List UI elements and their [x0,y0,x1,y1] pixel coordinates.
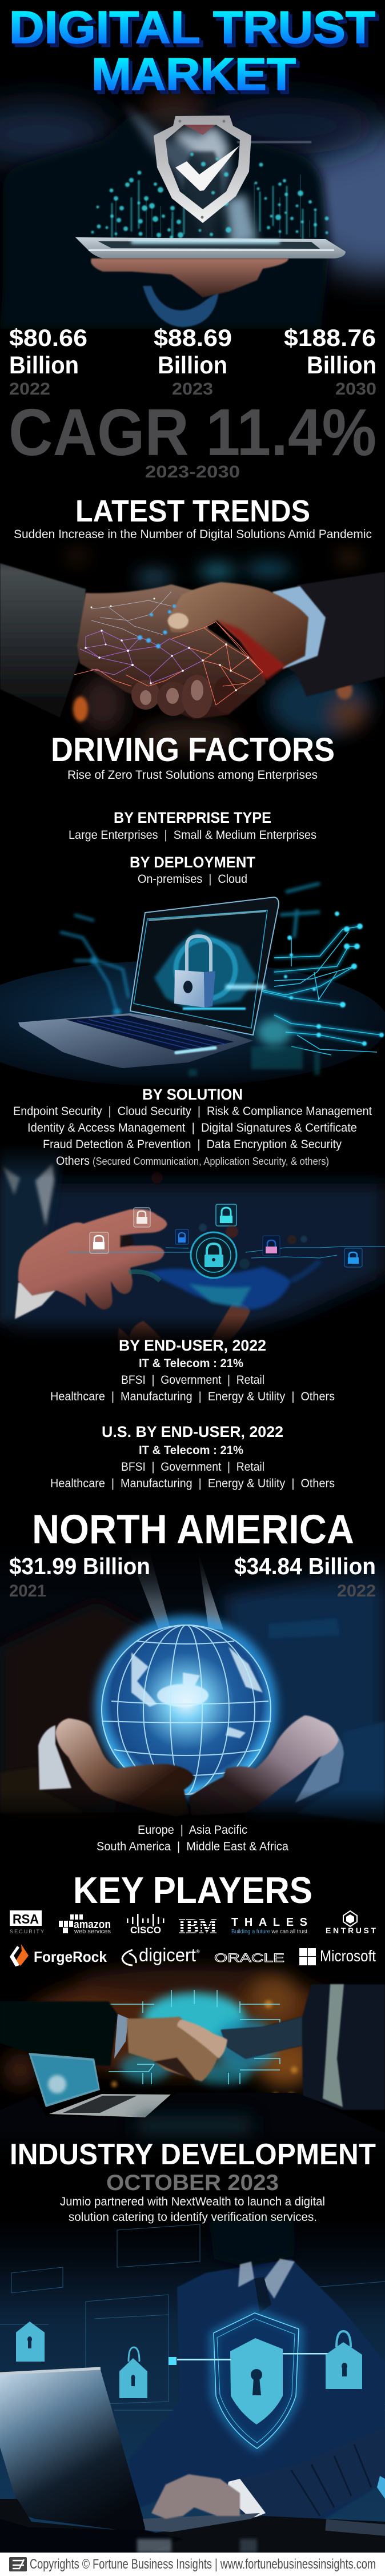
heading: KEY PLAYERS [73,1869,312,1911]
segment: global end-user: IT & Telecom : 21% [139,1357,243,1370]
suit figure [129,2219,385,2527]
segment: U.S. end-user: Healthcare | Manufacturing | Energy & Utility | Others [50,1477,335,1490]
panel: handshake over circuitry [0,1933,385,2161]
interface frames [0,2224,385,2410]
logo: RSA [10,1910,45,1934]
other regions: Europe | Asia Pacific [138,1823,247,1837]
backdrop [0,2219,385,2553]
segment: U.S. end-user: IT & Telecom : 21% [139,1444,243,1457]
logo: Amazon Web Services: amazon [74,1918,111,1931]
laptop base and keyboard [18,1013,253,1068]
far right shield emblem [377,2476,385,2499]
icon: pink blue lock [263,1236,280,1256]
photo: hand supporting the tablet [91,258,288,297]
logo: Thales: THALES [231,1916,307,1929]
segment: deployment: BY DEPLOYMENT [130,854,255,871]
development description: Jumio partnered with NextWealth to launch a digital [60,2195,325,2208]
CAGR period: 2023-2030 [145,463,240,481]
shirt panel [323,1984,344,2107]
circuit hologram [109,1990,280,2084]
logo: Thales: Building a future we can all trust [231,1929,307,1935]
logo: Cisco: CISCO [130,1925,161,1936]
wave lines [129,1261,320,1309]
photo: hands holding a glowing globe [0,1544,385,1830]
stat: 2030 [284,324,376,399]
panel: end-user segments [50,1337,335,1490]
logo: RSA: SECURITY [10,1929,45,1934]
heading: NORTH AMERICA [32,1507,354,1552]
segment: global end-user: BFSI | Government | Retail [121,1373,264,1387]
development description: solution catering to identify verification services. [69,2211,317,2224]
stat: 2021: 2021 [9,1582,46,1600]
stat: 2021: $31.99 Billion [9,1553,150,1579]
heading: DRIVING FACTORS [51,731,335,769]
stat: 2030: $188.76 [284,324,376,351]
panel: laptop with padlock [0,883,385,1098]
stat: 2022: $34.84 Billion [234,1553,376,1579]
logo: ForgeRock [10,1944,107,1966]
panel: driving factors [51,731,335,842]
stat: 2022: Billion [9,352,79,379]
sleeve and cuff below the tablet [143,286,219,327]
segment: U.S. end-user: U.S. BY END-USER, 2022 [102,1423,283,1440]
icon: upper lock [216,1204,236,1226]
segment: enterprise type: Large Enterprises | Small & Medium Enterprises [69,829,316,842]
logo: DigiCert: ® [196,1949,200,1954]
stat: 2023: $88.69 [154,324,232,351]
segment: U.S. end-user: BFSI | Government | Retail [121,1460,264,1474]
heading: LATEST TRENDS [75,494,310,528]
data particles rising from the tablet [91,153,329,240]
panel: cyber security photo [0,2219,385,2553]
segment: enterprise type: BY ENTERPRISE TYPE [114,809,271,826]
title: MARKET [91,49,296,99]
icon: laptop lid [0,2367,146,2533]
panel: market size stats [9,324,376,481]
segment: global end-user [50,1337,335,1403]
icon: metal shield with check mark [154,116,251,223]
segment: U.S. end-user [50,1423,335,1490]
other regions: South America | Middle East & Africa [97,1840,288,1853]
warm bokeh backdrop [3,1964,354,2087]
stat: 2022 [234,1553,376,1600]
panel: key players [10,1869,376,1966]
left blurred circuit lines [60,915,129,1015]
desk [0,2499,385,2553]
title: DIGITAL TRUST [11,3,377,54]
icon: tablet [75,237,346,258]
right sleeve [221,1984,385,2110]
floor glow [0,961,385,1086]
trend description: Sudden Increase in the Number of Digital Solutions Amid Pandemic [14,528,372,541]
icon: lock right [326,2331,362,2389]
icon: central lock in ring [191,1232,236,1278]
panel: north america [0,1507,385,1853]
laptop screen [130,897,279,1035]
icon: right lock [344,1248,362,1267]
development description [60,2195,325,2224]
blurred bokeh [151,1172,307,1269]
right circuit lines [262,881,385,1056]
solution list: Others [56,1154,90,1168]
photo: digital handshake [0,545,385,757]
arm highlight [221,2017,302,2059]
panel: industry development [10,2138,376,2224]
segment: global end-user: Healthcare | Manufacturing | Energy & Utility | Others [50,1390,335,1403]
icon: large shield [169,2312,331,2448]
stat: 2022: 2022 [337,1582,376,1600]
icon: lock on index finger [134,1208,150,1227]
circuit lines [69,1247,385,1258]
stat: 2021 [9,1553,150,1600]
segment: deployment [130,854,255,886]
title: MARKET [93,50,298,101]
panel: hero [0,2,385,329]
segment: deployment: On-premises | Cloud [138,873,247,886]
stat: 2023 [154,324,232,399]
segment: enterprise type [69,809,316,842]
solution list: (Secured Communication, Application Security, & others) [93,1156,329,1167]
solution list: Identity & Access Management | Digital Signatures & Certificate [27,1121,357,1134]
panel: hand touching security locks [0,1144,385,1344]
icon: lock top left [16,2322,45,2362]
icon: padlock [174,936,215,1008]
icon: lock on middle finger [90,1232,109,1253]
icon: small blue lock [175,1229,189,1244]
stat: 2023: Billion [158,352,227,379]
icon: Fortune Business Insights logo [9,2557,27,2571]
title: DIGITAL TRUST [9,2,375,53]
stat: 2022 [9,324,87,399]
solution list [13,1105,372,1168]
logo: Entrust [326,1911,376,1935]
logo: Amazon Web Services [59,1914,111,1935]
logo: Entrust: ENTRUST [326,1926,376,1935]
logo: Cisco [127,1914,165,1936]
clasped hands [127,2017,227,2081]
logo: Thales [231,1916,307,1935]
left sleeve [0,2001,118,2066]
date: OCTOBER 2023 [106,2171,279,2195]
heading: BY SOLUTION [142,1086,243,1103]
logo: Microsoft [299,1947,376,1965]
driver description: Rise of Zero Trust Solutions among Enterprises [67,769,318,782]
stat: 2022: 2022 [9,380,50,399]
stat: 2023: 2023 [172,380,213,399]
solution list: Fraud Detection & Prevention | Data Encryption & Security [43,1138,342,1151]
logo: DigiCert: digicert [139,1945,196,1965]
logo: RSA: RSA [13,1912,39,1926]
glow under circuit junction [257,1018,291,1046]
solution list: Endpoint Security | Cloud Security | Risk & Compliance Management [13,1105,372,1118]
suit backdrop [0,1144,385,1338]
other regions [97,1823,288,1853]
stat: 2022: $80.66 [9,324,87,351]
title: MARKET [95,52,299,103]
stat: 2030: 2030 [335,380,376,399]
icon: lock mid left [119,2347,147,2398]
panel: by solution [13,1086,372,1168]
title: DIGITAL TRUST [13,5,379,56]
hand [15,1209,250,1344]
logo: ForgeRock: ForgeRock [34,1948,107,1965]
footer [0,2553,385,2576]
dark table [0,2093,385,2161]
logo: Amazon Web Services: web services [74,1928,111,1935]
title [9,2,379,103]
laptop [29,2053,171,2117]
stat: 2030: Billion [307,352,376,379]
logo: Oracle: ORACLE [214,1952,284,1965]
logo: Microsoft: Microsoft [320,1947,376,1965]
reflection on desk [189,1046,320,1076]
photo: businessman holding a tablet [0,89,385,329]
typing hand [151,2474,240,2519]
panel: latest trends [0,494,385,778]
logo: IBM: IBM [178,1915,217,1938]
left cuff [114,2014,129,2059]
segment: global end-user: BY END-USER, 2022 [119,1337,266,1354]
heading: INDUSTRY DEVELOPMENT [10,2138,376,2171]
